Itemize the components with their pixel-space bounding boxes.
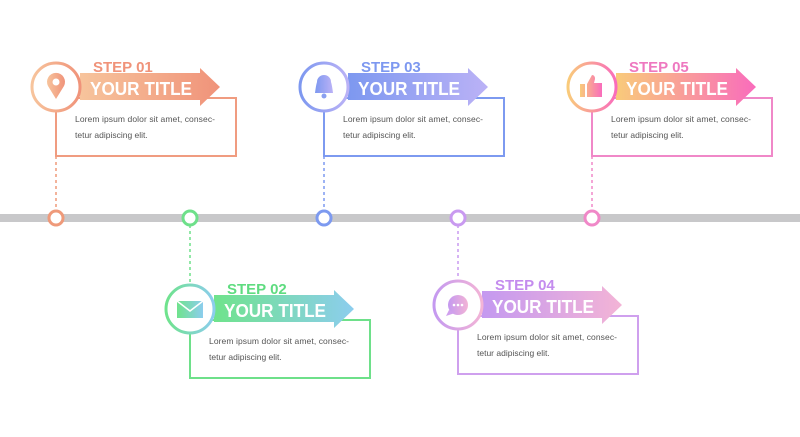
step label 2: STEP 02 [227,281,287,298]
icon: bell [315,75,333,93]
icon: thumbs up [580,75,602,97]
step 4: tetur adipiscing elit. [477,348,550,358]
icon circle 3 [300,63,348,111]
arrow 3 [348,68,488,106]
step 1: tetur adipiscing elit. [75,130,148,140]
icon circle 5 [568,63,616,111]
connector 1 [55,156,57,211]
step 2: tetur adipiscing elit. [209,352,282,362]
icon: pin [47,73,65,99]
body 3: Lorem ipsum dolor sit amet, consec- [343,114,483,124]
step label 1: STEP 01 [93,59,153,76]
timeline node 4 [451,211,465,225]
step 4 [434,211,638,374]
title 1: YOUR TITLE [90,79,192,99]
timeline node 2 [183,211,197,225]
body 2: Lorem ipsum dolor sit amet, consec- [209,336,349,346]
body 1: Lorem ipsum dolor sit amet, consec- [75,114,215,124]
step 1 [32,59,236,225]
icon circle 4 [434,281,482,329]
connector 2 [189,225,191,283]
icon circle 2 [166,285,214,333]
icon: chat [446,295,468,316]
step 5 [568,59,772,225]
title 2: YOUR TITLE [224,301,326,321]
icon: envelope [177,301,203,318]
timeline [0,214,800,222]
box 3 [324,98,504,156]
arrow 5 [616,68,756,106]
box 2 [190,320,370,378]
title 4: YOUR TITLE [492,297,594,317]
step 2 [166,211,370,378]
body 5: Lorem ipsum dolor sit amet, consec- [611,114,751,124]
arrow 4 [482,286,622,324]
box 5 [592,98,772,156]
step label 4: STEP 04 [495,277,555,294]
timeline node 1 [49,211,63,225]
body 4: Lorem ipsum dolor sit amet, consec- [477,332,617,342]
box 4 [458,316,638,374]
connector 3 [323,156,325,211]
arrow 2 [214,290,354,328]
connector 4 [457,225,459,279]
timeline node 5 [585,211,599,225]
timeline node 3 [317,211,331,225]
arrow 1 [80,68,220,106]
step label 5: STEP 05 [629,59,689,76]
step 5: tetur adipiscing elit. [611,130,684,140]
connector 5 [591,156,593,211]
icon circle 1 [32,63,80,111]
step 3: tetur adipiscing elit. [343,130,416,140]
box 1 [56,98,236,156]
step label 3: STEP 03 [361,59,421,76]
title 5: YOUR TITLE [626,79,728,99]
step 3 [300,59,504,225]
title 3: YOUR TITLE [358,79,460,99]
